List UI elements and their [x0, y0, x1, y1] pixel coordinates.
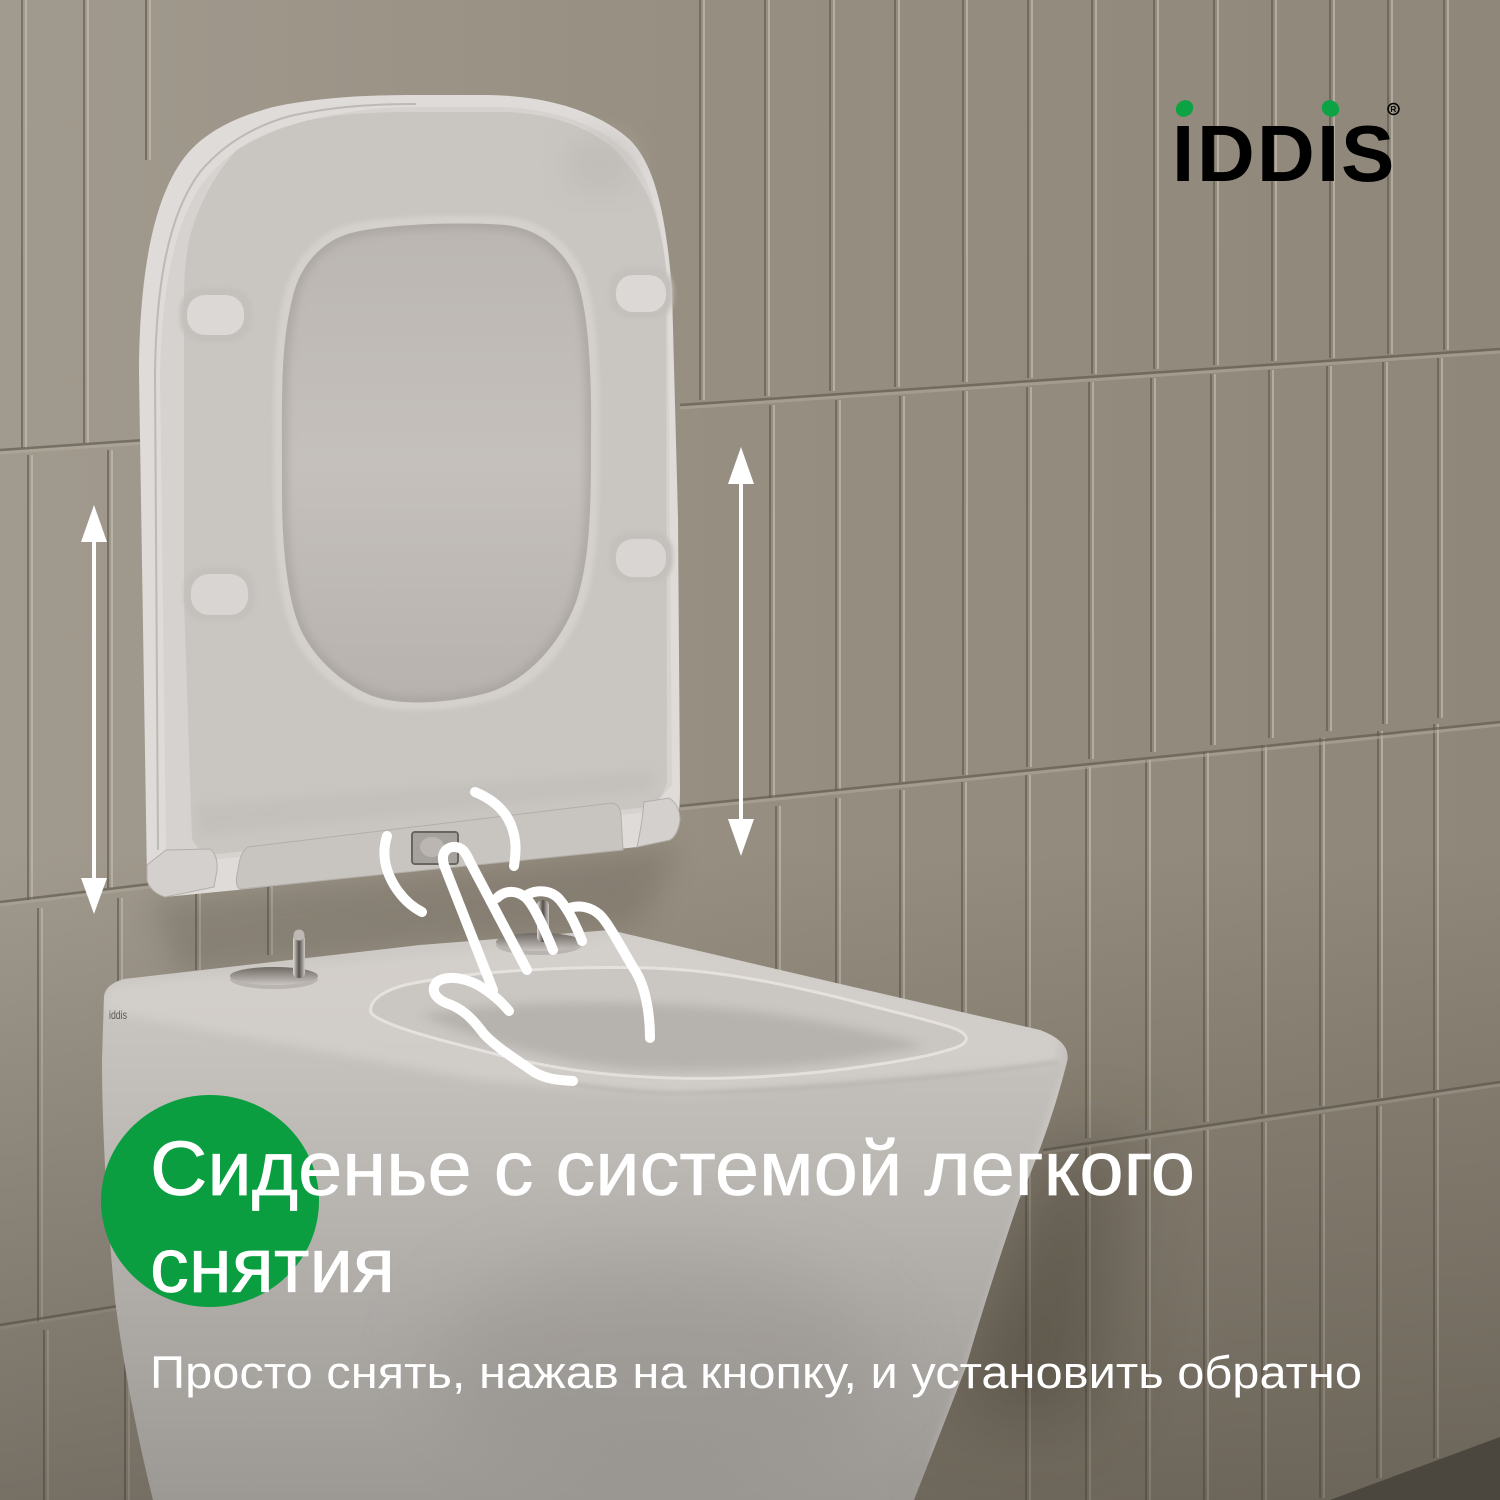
- chrome fastener left: [230, 930, 318, 989]
- thumb and palm: [434, 978, 573, 1081]
- bumper lower right: [609, 532, 673, 582]
- shadow on wall under seat: [150, 845, 680, 975]
- ring finger: [527, 891, 582, 941]
- hinge right: [637, 798, 680, 847]
- logo wordmark: IDDIS: [1172, 109, 1394, 198]
- seat inner band: [160, 107, 672, 860]
- wall darkening toward floor: [0, 850, 1500, 1500]
- hinge left: [147, 849, 217, 897]
- bumper lower left: [184, 567, 255, 621]
- logo green dot left: [1173, 97, 1196, 120]
- title: Сиденье с системой легкого: [150, 1126, 1195, 1212]
- central hole rim: [274, 216, 599, 710]
- toilet bowl: [100, 930, 1080, 1500]
- release button: [412, 832, 458, 864]
- middle finger: [497, 892, 553, 950]
- bumper upper right: [609, 268, 673, 318]
- small logo on bowl: iddis: [109, 1008, 127, 1022]
- green circle accent: [101, 1095, 319, 1307]
- logo: [1172, 97, 1399, 198]
- rim front edge: [560, 1062, 1058, 1093]
- bowl body: [102, 930, 1068, 1500]
- body shading: [100, 935, 1080, 1485]
- floor: [1330, 1437, 1500, 1500]
- press mark right: [475, 792, 516, 866]
- seat outer edge: [139, 95, 680, 897]
- seat recess: [184, 112, 667, 855]
- toilet seat lid: [139, 95, 680, 897]
- seat rim ridges: [155, 104, 416, 850]
- bumper upper left: [180, 288, 252, 342]
- icon: hand pressing button: [384, 792, 650, 1081]
- registered mark: [1388, 104, 1399, 114]
- registered mark: R: [1390, 105, 1396, 114]
- logo green dot right: [1319, 97, 1342, 120]
- index finger: [443, 847, 527, 990]
- chrome fastener right: [496, 900, 582, 955]
- title: снятия: [150, 1223, 395, 1309]
- press mark left: [384, 836, 422, 912]
- title: [150, 1126, 1195, 1309]
- little finger and side of hand: [570, 906, 650, 1038]
- hole inner shadow: [282, 224, 591, 702]
- recess soft shading: [564, 135, 636, 195]
- arrow left: [81, 505, 107, 914]
- subtitle: Просто снять, нажав на кнопку, и установить обратно: [150, 1347, 1362, 1398]
- bowl opening: [371, 968, 966, 1078]
- shadow beside bowl: [950, 1140, 1130, 1420]
- arrow right: [728, 447, 754, 856]
- central hole: [282, 224, 591, 702]
- recess lower shading: [195, 770, 655, 835]
- hinge bar: [236, 803, 623, 889]
- bowl inner shade: [420, 1003, 925, 1070]
